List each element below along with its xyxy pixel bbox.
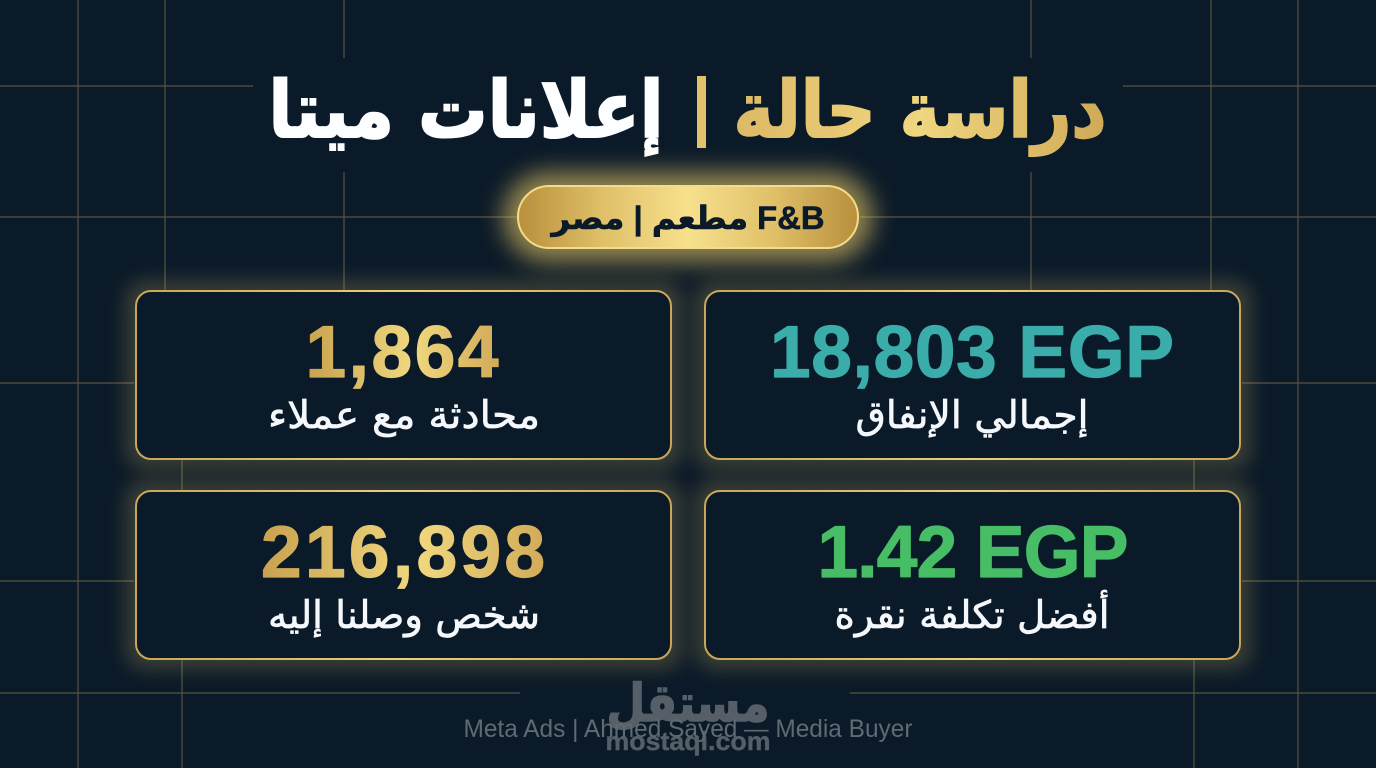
value: people reached: 216,898 [261, 512, 545, 593]
badge: F&B restaurant Egypt [503, 172, 873, 262]
watermark logo: mostaqi.com [606, 726, 770, 756]
label: cost per click: أفضل تكلفة نقرة [834, 590, 1110, 638]
title: gold part: دراسة حالة [734, 66, 1106, 156]
panel: best cost per click [694, 480, 1252, 670]
panel: total spend [694, 280, 1252, 470]
badge: F&B restaurant Egypt: F&B مطعم | مصر [549, 200, 824, 237]
label: conversations: محادثة مع عملاء [268, 393, 540, 438]
title: white part: إعلانات ميتا [268, 66, 664, 157]
value: conversations: 1,864 [306, 312, 499, 393]
title [268, 66, 1106, 157]
footer credit: Meta Ads | Ahmed Sayed — Media Buyer [464, 715, 912, 743]
watermark logo: مستقل [606, 674, 770, 734]
panel: customer conversations [125, 280, 683, 470]
watermark logo [606, 674, 770, 756]
label: total spend: إجمالي الإنفاق [856, 393, 1088, 438]
label: people reached: شخص وصلنا إليه [268, 593, 540, 638]
panel: people reached [125, 480, 683, 670]
value: cost per click: 1.42 EGP [818, 512, 1128, 593]
value: total spend: 18,803 EGP [770, 312, 1174, 393]
title: separator [697, 76, 706, 148]
